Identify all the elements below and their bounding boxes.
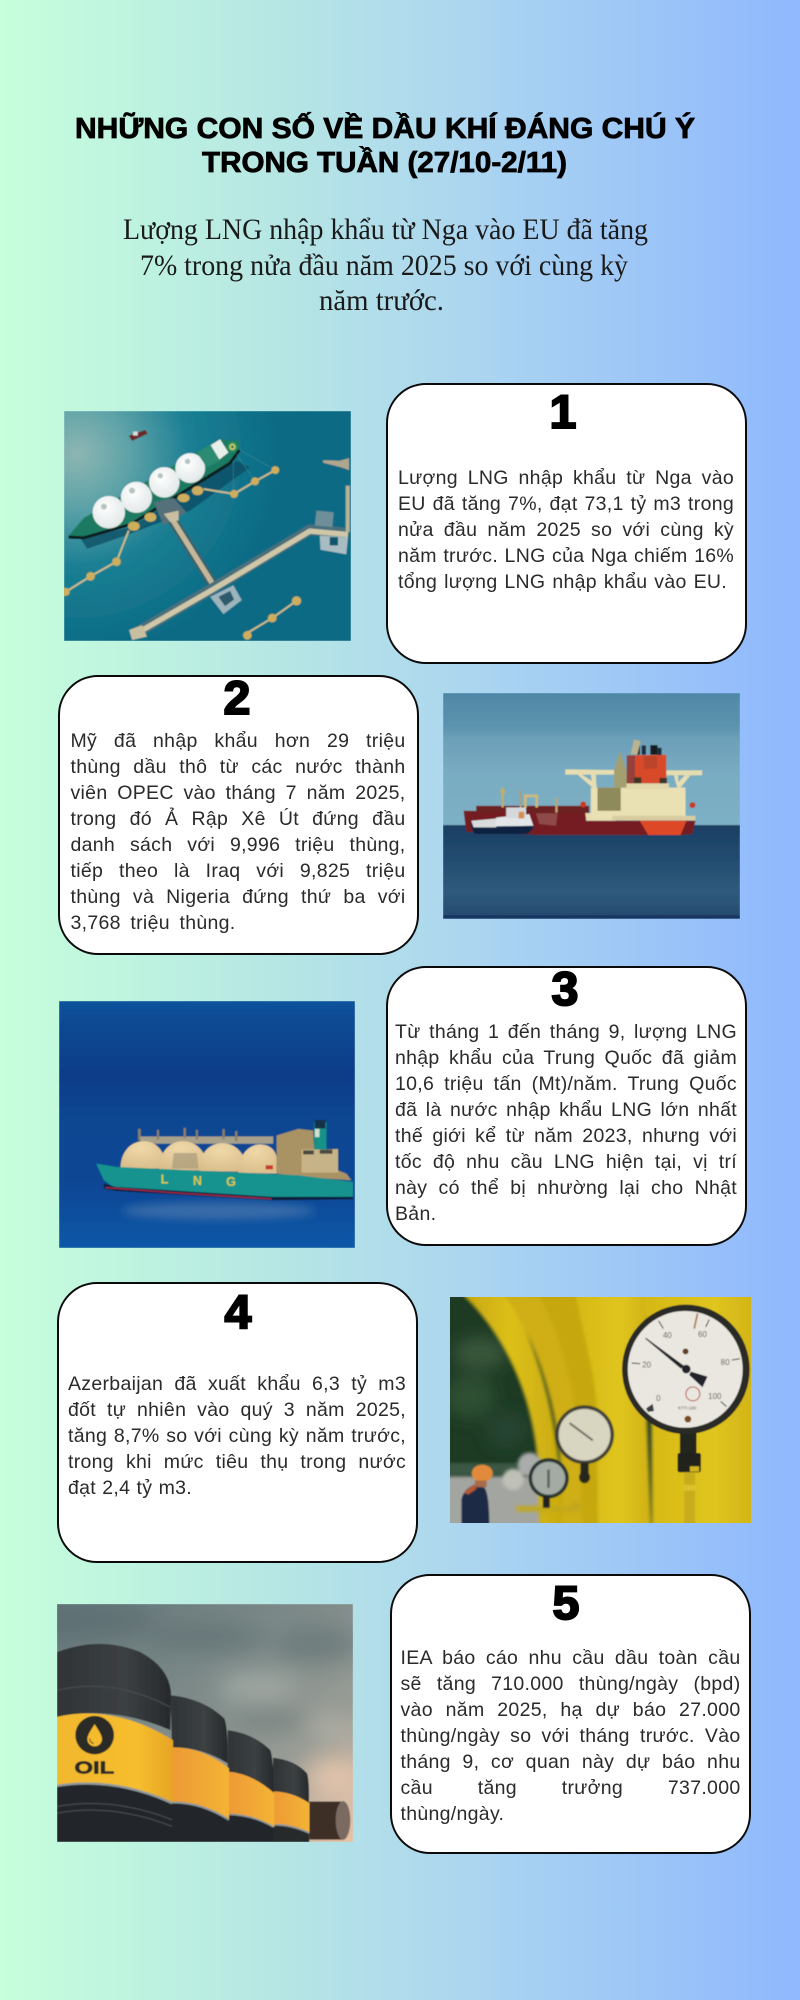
photo: LNG tanker at jetty, aerial view	[64, 411, 351, 641]
number 4: 4	[225, 1285, 251, 1338]
card 5	[390, 1574, 751, 1854]
text block 2: danh sách với 9,996 triệu thùng,	[70, 834, 406, 856]
text block 5	[400, 1647, 740, 1825]
barrel 2	[170, 1695, 228, 1763]
text block 5: sẽ tăng 710.000 thùng/ngày (bpd)	[400, 1673, 740, 1695]
card 3	[386, 966, 747, 1246]
text block 4: tăng 8,7% so với cùng kỳ năm trước,	[68, 1425, 406, 1447]
number 5: 5	[553, 1576, 579, 1629]
LNG lettering	[161, 1172, 236, 1189]
subtitle	[123, 213, 648, 317]
ship hull	[68, 439, 240, 538]
text block 4: đốt tự nhiên vào quý 3 năm 2025,	[68, 1399, 406, 1421]
title: TRONG TUẦN (27/10-2/11)	[202, 145, 567, 179]
text block 2: viên OPEC vào tháng 7 năm 2025,	[70, 782, 406, 804]
photo: pressure gauges on yellow pipes: 100	[708, 1392, 722, 1401]
text block 3: Bản.	[395, 1203, 436, 1225]
number 2: 2	[224, 671, 250, 724]
oil drop logo	[75, 1716, 114, 1754]
text block 4: Azerbaijan đã xuất khẩu 6,3 tỷ m3	[68, 1373, 406, 1395]
text block 2: thùng dầu thô từ các nước thành	[70, 756, 406, 778]
text block 5: vào năm 2025, hạ dự báo 27.000	[400, 1699, 740, 1721]
card 4	[57, 1282, 418, 1563]
superstructure	[277, 1129, 351, 1180]
subtitle: năm trước.	[319, 284, 444, 317]
text block 3: đã là nước nhập khẩu LNG lớn nhất	[395, 1099, 737, 1121]
text block 4: trong khi mức tiêu thụ trong nước	[68, 1451, 406, 1473]
text block 2: trong đó Ả Rập Xê Út đứng đầu	[70, 808, 406, 830]
text block 3: 10,6 triệu tấn (Mt)/năm. Trung Quốc	[395, 1073, 737, 1095]
LNG lettering: N	[193, 1174, 202, 1188]
yellow pipes	[457, 1289, 761, 1533]
barrel 5 side	[309, 1802, 350, 1840]
photo: pressure gauges on yellow pipes: КТП-160	[678, 1406, 697, 1411]
text block 3: nhập khẩu của Trung Quốc đã giảm	[395, 1047, 737, 1069]
LNG lettering: G	[226, 1175, 236, 1189]
text block 4: đạt 2,4 tỷ m3.	[68, 1477, 192, 1499]
text block 3: này có thể bị nhường lại cho Nhật	[395, 1177, 737, 1199]
subtitle: Lượng LNG nhập khẩu từ Nga vào EU đã tăng	[123, 213, 648, 246]
text block 3: tốc độ nhu cầu LNG hiện tại, vị trí	[395, 1151, 737, 1173]
photo: LNG carrier on blue sea	[59, 1001, 355, 1248]
text block 2: 3,768 triệu thùng.	[70, 912, 236, 934]
text block 3	[395, 1021, 737, 1225]
hull	[96, 1164, 353, 1199]
domes	[120, 1141, 166, 1169]
card 1	[386, 383, 747, 664]
title	[75, 111, 695, 179]
text block 5: IEA báo cáo nhu cầu dầu toàn cầu	[400, 1647, 740, 1669]
text block 1	[398, 467, 734, 593]
photo: oil barrels under cloudy sky	[57, 1604, 353, 1842]
text block 1: năm trước. LNG của Nga chiếm 16%	[398, 545, 734, 567]
text block 5: cầu tăng trưởng 737.000	[400, 1777, 740, 1799]
text block 5: tháng 9, cơ quan này dự báo nhu	[400, 1751, 740, 1773]
photo: pressure gauges on yellow pipes: 80	[721, 1358, 730, 1367]
photo: pressure gauges on yellow pipes: 0	[656, 1394, 661, 1403]
title: NHỮNG CON SỐ VỀ DẦU KHÍ ĐÁNG CHÚ Ý	[75, 111, 695, 145]
photo: pressure gauges on yellow pipes: 60	[698, 1330, 707, 1339]
barrel 1	[57, 1644, 171, 1730]
mooring dolphins	[66, 470, 297, 635]
barrel 3	[228, 1730, 274, 1793]
photo: pressure gauges on yellow pipes: 40	[663, 1331, 672, 1340]
text block 2: tiếp theo là Iraq với 9,825 triệu	[70, 860, 406, 882]
photo: pressure gauges on yellow pipes: 20	[642, 1361, 652, 1370]
deck piping	[138, 1129, 141, 1140]
text block 1: tổng lượng LNG nhập khẩu vào EU.	[398, 571, 727, 593]
text block 1: Lượng LNG nhập khẩu từ Nga vào	[398, 467, 734, 489]
LNG lettering: L	[161, 1172, 169, 1186]
worker	[462, 1465, 493, 1529]
photo: red oil tanker at sea	[443, 693, 740, 919]
text block 2	[70, 730, 406, 934]
barrel 4	[273, 1758, 309, 1803]
subtitle: 7% trong nửa đầu năm 2025 so với cùng kỳ	[140, 249, 628, 282]
text block 5: thùng/ngày so với tháng trước. Vào	[400, 1725, 740, 1747]
number 1: 1	[550, 385, 576, 438]
ship	[464, 811, 695, 835]
photo: pressure gauges on yellow pipes	[450, 1297, 751, 1523]
text block 3: thế giới kể từ năm 2023, nhưng với	[395, 1125, 737, 1147]
small vessel	[471, 821, 533, 834]
text block 1: nửa đầu năm 2025 so với cùng kỳ	[398, 519, 734, 541]
photo: oil barrels under cloudy sky: OIL	[74, 1758, 114, 1778]
main gauge	[680, 1431, 697, 1458]
text block 5: thùng/ngày.	[400, 1803, 504, 1825]
back gauges	[502, 1453, 582, 1512]
text block 2: Mỹ đã nhập khẩu hơn 29 triệu	[70, 730, 406, 752]
text block 2: thùng và Nigeria đứng thứ ba với	[70, 886, 406, 908]
title and subtitle heading	[75, 111, 696, 317]
text block 3: Từ tháng 1 đến tháng 9, lượng LNG	[395, 1021, 737, 1043]
card 2	[58, 675, 419, 955]
text block 4	[68, 1373, 406, 1499]
text block 1: EU đã tăng 7%, đạt 73,1 tỷ m3 trong	[398, 493, 734, 515]
number 3: 3	[552, 962, 578, 1015]
pier and trestle	[172, 519, 213, 585]
